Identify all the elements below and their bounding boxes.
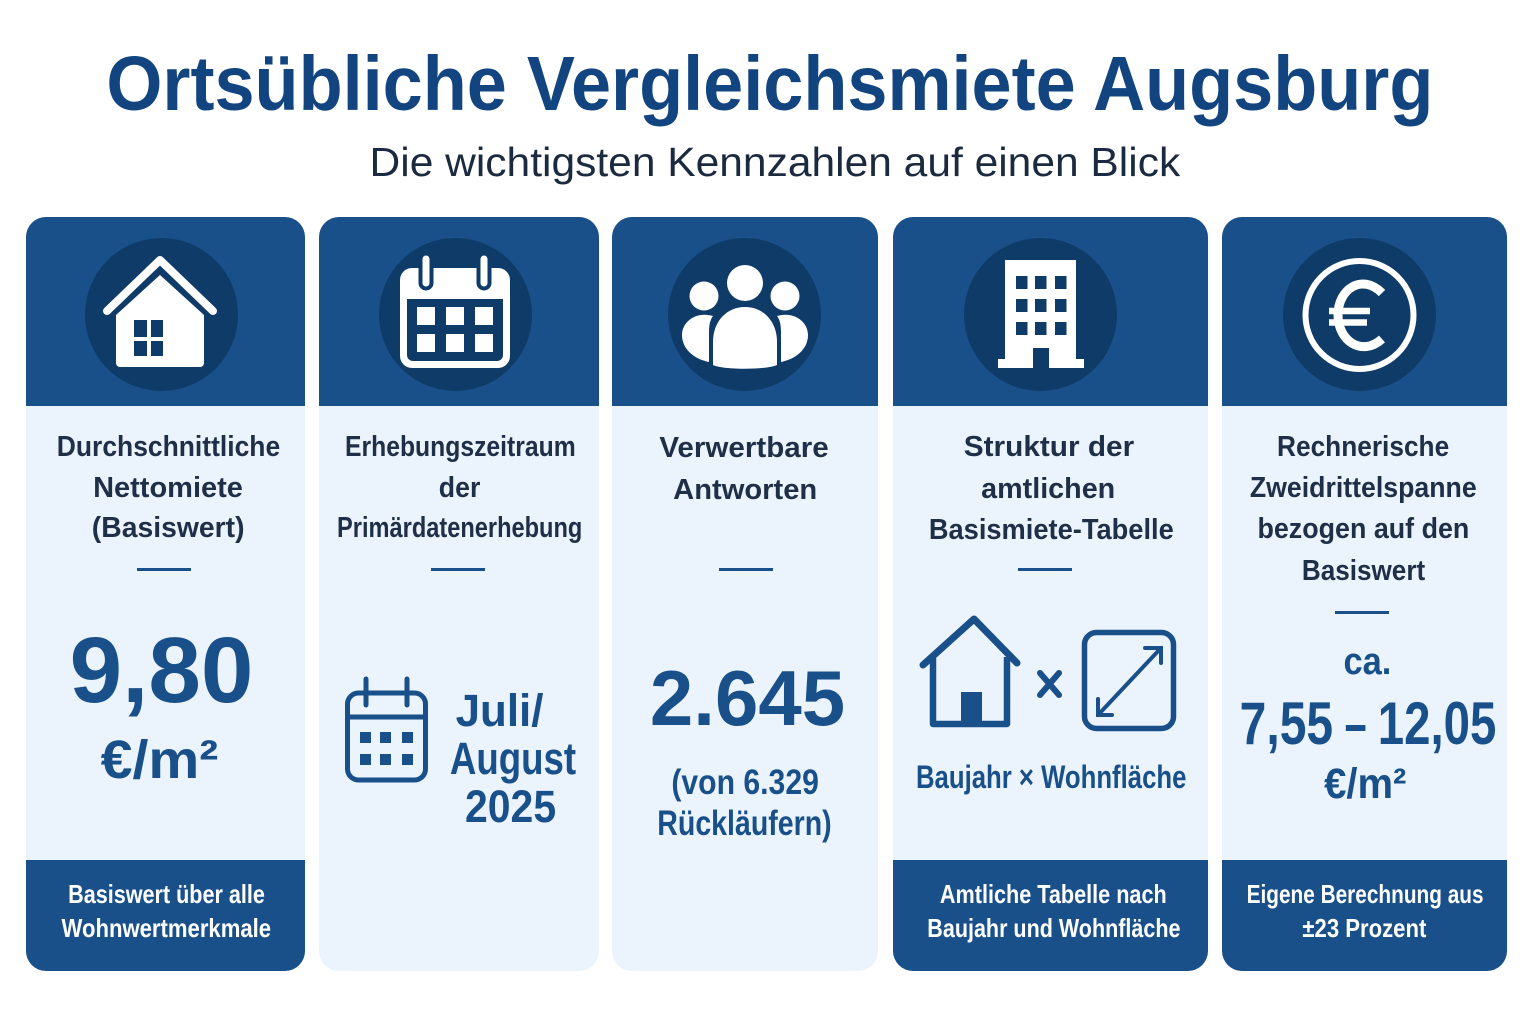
heading: Rechnerische [1277, 431, 1450, 463]
value: 9,80 [70, 618, 254, 722]
period value: Juli/ [456, 685, 543, 736]
heading [929, 431, 1173, 546]
heading: Zweidrittelspanne [1250, 472, 1477, 504]
heading: bezogen auf den [1258, 513, 1469, 545]
responses note: (von 6.329 [671, 763, 819, 802]
axis caption: Baujahr × Wohnfläche [916, 759, 1186, 795]
period value: August [449, 733, 576, 784]
heading: Antworten [673, 474, 818, 506]
footer note: Eigene Berechnung aus [1247, 879, 1483, 909]
value: 2.645 [650, 654, 845, 742]
footer note: Basiswert über alle [68, 879, 264, 909]
heading: Verwertbare [659, 432, 829, 464]
footer note: Baujahr und Wohnfläche [927, 912, 1180, 942]
heading: Basiswert [1302, 555, 1425, 587]
footer note: ±23 Prozent [1303, 912, 1426, 942]
heading: Erhebungszeitraum [345, 431, 575, 463]
heading: der [439, 472, 481, 504]
ca. label: ca. [1343, 641, 1391, 683]
icon: euro coin [1302, 258, 1416, 372]
heading: Primärdatenerhebung [337, 512, 583, 544]
range value [1239, 690, 1496, 757]
heading: Basismiete-Tabelle [929, 514, 1173, 546]
panel: Erhebungszeitraum [319, 217, 599, 971]
unit: €/m² [1324, 760, 1406, 808]
range value: 7,55 [1239, 690, 1333, 757]
icon: house [103, 256, 217, 367]
footer note [1247, 879, 1483, 942]
heading [56, 431, 280, 544]
footer note: Amtliche Tabelle nach [940, 879, 1167, 909]
range value: – [1345, 690, 1367, 757]
footer note [927, 879, 1180, 942]
unit: €/m² [101, 730, 218, 790]
heading: (Basiswert) [92, 512, 244, 544]
icon: group of people [682, 265, 808, 369]
title: Ortsübliche Vergleichsmiete Augsburg [107, 41, 1434, 127]
footer note [61, 879, 271, 942]
panel: Struktur [893, 217, 1208, 971]
panel: Antworten [612, 217, 878, 971]
heading [1250, 431, 1477, 587]
responses note: Rückläufern) [657, 804, 831, 843]
heading: Struktur der [964, 431, 1134, 463]
heading [337, 431, 583, 544]
subtitle: Die wichtigsten Kennzahlen auf einen Blick [369, 139, 1180, 185]
panel: Nettomiete [26, 217, 305, 971]
icon: small calendar [345, 676, 428, 782]
heading: Durchschnittliche [56, 431, 280, 463]
icon: office building [998, 260, 1084, 368]
period value [449, 685, 576, 832]
period value: 2025 [465, 781, 556, 832]
icon: calendar [400, 256, 510, 368]
icon: house times area [920, 616, 1176, 732]
responses note [657, 763, 831, 843]
heading: amtlichen [981, 472, 1116, 504]
heading: Nettomiete [93, 472, 243, 504]
heading [659, 432, 829, 506]
footer note: Wohnwertmerkmale [61, 912, 271, 942]
range value: 12,05 [1378, 690, 1496, 757]
panel: Zweidrittelspanne [1222, 217, 1507, 971]
